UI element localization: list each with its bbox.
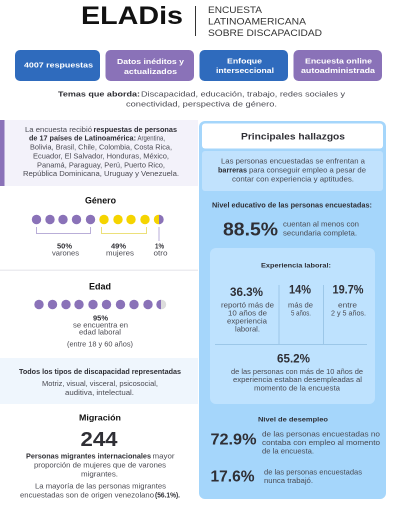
badge: datos inéditos: Datos inéditos y [117, 57, 185, 66]
badge: encuesta online [294, 50, 382, 81]
stat: 65.2%: 65.2% [277, 354, 310, 366]
topics text [58, 90, 345, 108]
badge: datos inéditos: actualizados [124, 67, 177, 76]
stat: 36.3%: laboral. [235, 324, 260, 334]
badge: 4007 respuestas: 4007 respuestas [24, 60, 93, 70]
label: otro: otro [154, 250, 168, 258]
panel: tipos de discapacidad: Motriz, visual, visceral, psicosocial, [42, 379, 158, 388]
dot chart: edad [34, 300, 166, 309]
heading: edad: Edad [89, 282, 111, 292]
text: edad laboral: 95% [93, 316, 109, 322]
header subtitle: LATINOAMERICANA [208, 16, 306, 26]
label: mujeres: mujeres [106, 250, 135, 258]
stat: 65.2%: de las personas con más de 10 años de [231, 367, 363, 376]
stat: 17.6%: 17.6% [210, 468, 255, 486]
label: otro: 1% [155, 244, 165, 250]
text: edad laboral: (entre 18 y 60 años) [67, 342, 133, 348]
stat: 88.5%: cuentan al menos con [283, 220, 359, 228]
callout: barreras: barreras [218, 166, 247, 174]
label: varones [52, 244, 80, 258]
panel: tipos de discapacidad: Todos los tipos de discapacidad representadas [19, 367, 181, 376]
text: migrantes [20, 452, 180, 500]
section: género [32, 196, 168, 258]
text: edad laboral: edad laboral [79, 330, 121, 336]
stat: 19.7% [331, 282, 366, 318]
panel: countries: Bolivia, Brasil, Chile, Colombia, Costa Rica, [30, 142, 172, 152]
panel: countries: Ecuador, El Salvador, Honduras, México, [33, 152, 169, 160]
callout: barreras [202, 151, 383, 191]
text: migrantes: La mayoría de las personas migrantes [35, 482, 166, 490]
badge: datos inéditos [106, 50, 194, 81]
text: migrantes: mayor [152, 452, 175, 460]
label: otro [154, 244, 168, 258]
panel: countries: La encuesta recibió [25, 125, 92, 134]
header logo [81, 2, 196, 36]
stat: 72.9%: de las personas encuestadas no [262, 430, 380, 438]
stat: 88.5%: 88.5% [223, 220, 278, 240]
stat: 88.5%: secundaria completa. [283, 228, 357, 238]
stat: 36.3%: experiencia [227, 316, 267, 326]
panel: countries: de 17 países de Latinoamérica: [29, 134, 136, 142]
text: edad laboral [67, 316, 133, 348]
text: migrantes: Personas migrantes internacionales [26, 452, 151, 460]
topics text: Temas que aborda: [58, 90, 140, 98]
stat: 14%: 14% [289, 282, 311, 296]
text: migrantes: proporción de mujeres que de varones [34, 460, 166, 470]
text: migrantes: migrantes. [81, 470, 118, 478]
stat: 244: 244 [80, 429, 118, 451]
stat: 19.7%: 2 y 5 años. [331, 308, 366, 318]
heading: principales hallazgos [202, 124, 383, 148]
section: edad [34, 282, 166, 348]
stat: 19.7%: entre [338, 300, 357, 310]
topics text: conectividad, perspectiva de género. [126, 100, 277, 108]
panel: countries [0, 120, 198, 186]
stat: 36.3%: 36.3% [230, 285, 263, 299]
stat: 65.2% [231, 354, 363, 392]
heading: nivel educativo: Nivel educativo de las personas encuestadas: [212, 200, 372, 210]
panel: countries: Argentina, [138, 134, 165, 142]
callout: barreras: Las personas encuestadas se enfrentan a [221, 156, 365, 166]
header subtitle: ENCUESTA [208, 5, 262, 15]
panel: principales hallazgos [199, 121, 386, 499]
heading: nivel de desempleo: Nivel de desempleo [258, 416, 328, 424]
panel: experiencia laboral [210, 248, 375, 404]
stat: 36.3% [221, 285, 274, 334]
stat: 14% [288, 282, 313, 318]
stat: 72.9%: 72.9% [210, 432, 257, 448]
stat: 65.2%: experiencia estaban desempleadas al [233, 375, 362, 384]
text: migrantes: encuestadas son de origen venezolano [20, 490, 154, 500]
panel: tipos de discapacidad [0, 358, 198, 404]
header subtitle: SOBRE DISCAPACIDAD [208, 28, 323, 38]
badge: 4007 respuestas [15, 50, 100, 81]
header logo: ELADis [81, 2, 183, 30]
stat: 72.9%: de la encuesta. [262, 446, 314, 456]
stat: 88.5% [223, 220, 359, 240]
label: varones: 50% [57, 244, 73, 250]
stat: 72.9% [210, 430, 380, 456]
dot chart: género [32, 215, 164, 241]
label: mujeres [106, 244, 135, 258]
stat: 36.3%: reportó más de [221, 300, 274, 310]
badge: enfoque interseccional [200, 50, 288, 81]
label: mujeres: 49% [111, 244, 127, 250]
topics text: Discapacidad, educación, trabajo, redes sociales y [141, 90, 345, 98]
stat: 17.6% [210, 468, 362, 486]
stat: 14%: 5 años. [291, 308, 311, 318]
stat: 17.6%: de las personas encuestadas [264, 468, 362, 476]
stat: 72.9%: contaba con empleo al momento [262, 438, 380, 447]
badge: enfoque interseccional: Enfoque [227, 56, 262, 66]
panel: countries: respuestas de personas [94, 125, 177, 134]
badge: encuesta online: Encuesta online [305, 56, 372, 66]
text: migrantes: (56.1%). [155, 490, 180, 500]
label: varones: varones [52, 250, 80, 258]
stat: 17.6%: nunca trabajó. [264, 476, 313, 485]
badge: enfoque interseccional: interseccional [216, 66, 274, 75]
badge: encuesta online: autoadministrada [301, 66, 376, 75]
heading: experiencia laboral: Experiencia laboral: [261, 262, 331, 270]
panel: tipos de discapacidad: auditiva, intelectual. [65, 388, 134, 397]
callout: barreras: para conseguir empleo a pesar de [249, 166, 366, 174]
heading: principales hallazgos: Principales hallazgos [241, 132, 345, 142]
header subtitle [208, 5, 323, 38]
section: migración [20, 412, 180, 500]
heading: género: Género [85, 196, 116, 206]
text: edad laboral: se encuentra en [73, 322, 128, 330]
panel: countries: Panamá, Paraguay, Perú, Puerto Rico, [37, 160, 165, 170]
stat: 65.2%: momento de la encuesta [254, 384, 340, 392]
heading: migración: Migración [79, 412, 121, 422]
panel: countries: República Dominicana, Uruguay y Venezuela. [23, 169, 179, 178]
stat: 36.3%: 10 años de [228, 308, 267, 318]
stat: 14%: más de [288, 300, 313, 310]
callout: barreras: contar con experiencia y aptitudes. [232, 174, 354, 184]
stat: 19.7%: 19.7% [332, 282, 364, 296]
